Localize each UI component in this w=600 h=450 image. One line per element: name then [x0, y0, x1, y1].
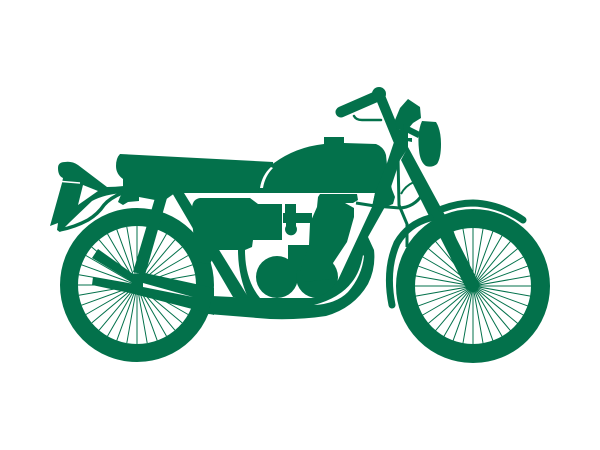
connector with bolt [283, 204, 312, 235]
exhaust pipes [92, 249, 214, 315]
front fork [401, 147, 480, 290]
frame diagonal [171, 191, 250, 300]
headlight bracket [402, 124, 420, 142]
fuel tank [258, 137, 392, 193]
front fender [389, 203, 523, 305]
tank seat gap [260, 167, 273, 188]
air box [192, 198, 282, 264]
rear wheel [69, 217, 205, 353]
engine crankcase [256, 194, 358, 298]
handlebar [341, 87, 398, 140]
rear suspension strut [133, 198, 167, 275]
tail section [50, 162, 124, 232]
header pipe [238, 250, 260, 298]
seat [116, 154, 277, 205]
cradle gap [314, 255, 364, 305]
horizontal brace and cables [356, 158, 422, 247]
instrument cluster [395, 99, 421, 130]
steering neck [372, 128, 408, 208]
down tube and lower cradle [208, 193, 386, 319]
headlight [418, 121, 441, 167]
front wheel [406, 218, 540, 354]
